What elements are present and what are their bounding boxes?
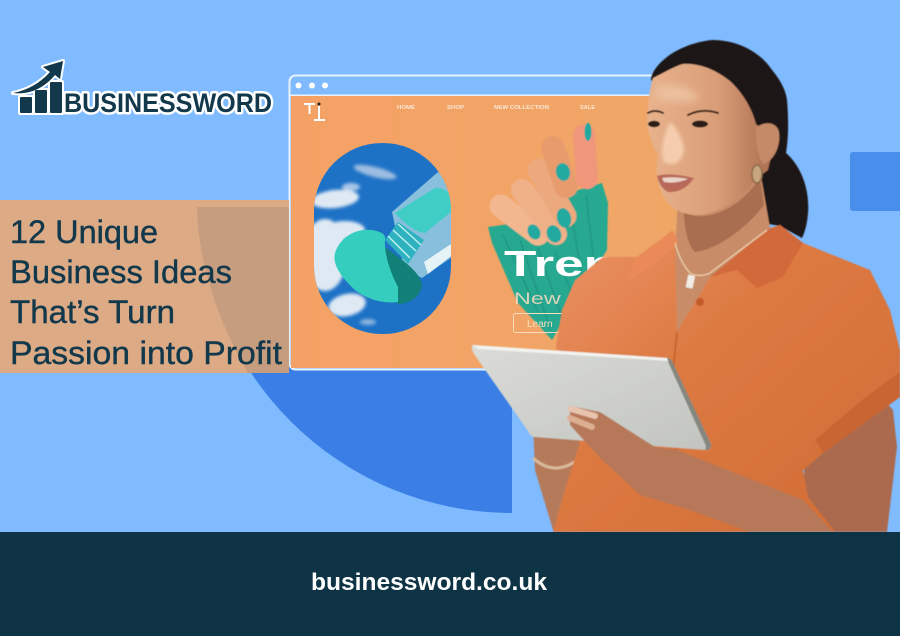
bottle neck (385, 222, 424, 264)
panel background (0, 200, 289, 373)
panel darker arc (197, 207, 289, 373)
logo wordmark: BUSINESSWORD (64, 88, 272, 118)
site logo (304, 102, 325, 121)
ear (756, 123, 779, 164)
eyebrows (648, 111, 718, 115)
fingers (501, 135, 587, 234)
ponytail and back of hair (651, 40, 808, 238)
hand and sweater photo (488, 123, 608, 340)
logo (13, 61, 272, 118)
eyes (648, 120, 708, 128)
bottle glass (392, 172, 455, 278)
hand and forearm over tablet (570, 406, 833, 532)
earring (752, 165, 762, 183)
face (647, 64, 775, 215)
title text: That’s Turn (10, 294, 175, 330)
logo outline (13, 61, 63, 113)
nails (525, 123, 592, 245)
shirt collar (639, 230, 678, 256)
left forearm (533, 420, 585, 530)
bottle cap (395, 188, 451, 233)
orange web page (291, 96, 689, 368)
web page subheading: New C (514, 289, 584, 308)
nail polish oval photo (303, 143, 455, 334)
highlight on nose and cheek (662, 122, 684, 164)
woman with tablet (472, 40, 900, 532)
shirt placket and button (672, 298, 704, 450)
decorative blue rectangle (850, 152, 900, 211)
title text: Business Ideas (10, 254, 232, 290)
browser frame (290, 76, 690, 370)
necklace (675, 230, 767, 276)
logo arrow (13, 61, 63, 93)
polish puddle (334, 230, 398, 302)
title panel (0, 200, 289, 373)
right arm (803, 395, 897, 532)
site navigation: SALE (580, 105, 596, 111)
site navigation: SHOP (447, 105, 465, 111)
footer website text: businessword.co.uk (311, 569, 548, 596)
site navigation (397, 105, 596, 111)
fingertips (570, 409, 595, 427)
sweater ribs (503, 195, 594, 328)
polish puddle dark (385, 247, 422, 304)
web page button: Learn (527, 319, 553, 330)
sleeve cuff (815, 372, 900, 453)
footer bar (0, 532, 900, 636)
browser window dots (296, 82, 328, 88)
logo bars (20, 82, 62, 113)
clouds (314, 162, 398, 327)
site navigation: HOME (397, 105, 416, 111)
neck and chest (675, 170, 770, 332)
title text: Passion into Profit (10, 335, 282, 371)
mouth (657, 174, 694, 192)
web page heading: Tren (504, 243, 616, 284)
web page button (514, 314, 574, 332)
title text (10, 214, 282, 371)
shirt (553, 225, 900, 532)
decorative blue quarter circle (199, 200, 512, 513)
title text: 12 Unique (10, 214, 158, 250)
sweater cuff (488, 183, 608, 340)
site navigation: NEW COLLECTION (494, 105, 549, 111)
browser mockup (290, 76, 690, 370)
bracelet (533, 458, 580, 468)
tablet (472, 345, 711, 450)
